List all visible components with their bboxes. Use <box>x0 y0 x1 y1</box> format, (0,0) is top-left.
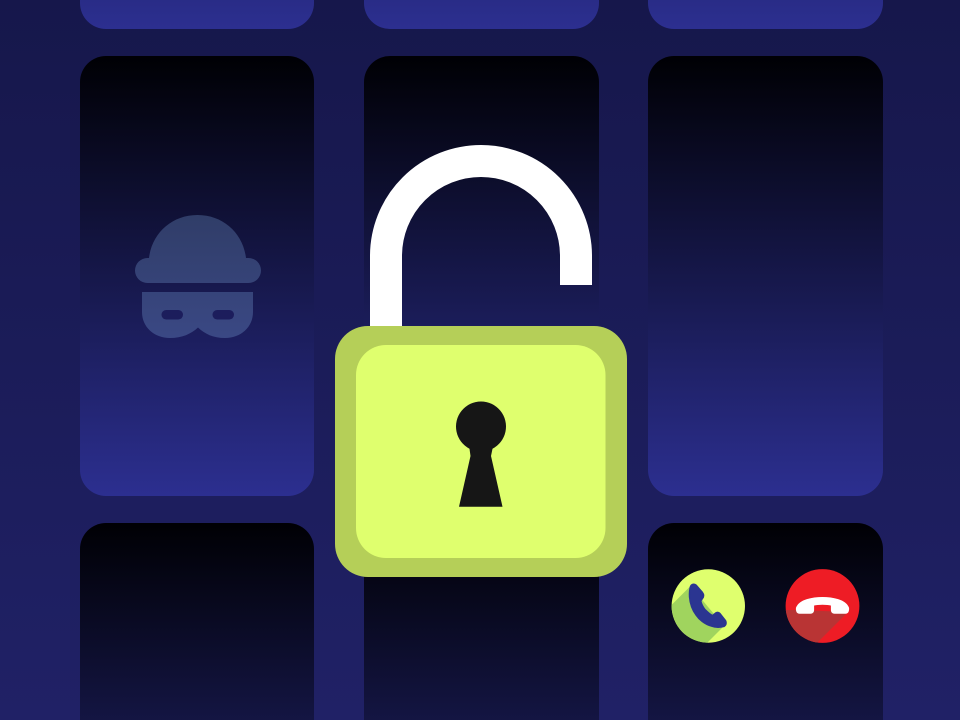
middle row screen left <box>80 56 314 496</box>
middle row screen centre <box>364 56 599 496</box>
top row screen centre <box>364 0 599 29</box>
green long shadow <box>672 586 722 643</box>
handset <box>796 597 849 613</box>
thief mask <box>142 292 253 338</box>
green circle <box>672 569 745 643</box>
red long shadow <box>786 610 846 642</box>
icon: accept call button <box>672 569 745 643</box>
red circle <box>786 569 859 643</box>
bottom row screen centre <box>364 523 599 720</box>
icon: decline call button <box>786 569 860 643</box>
icon: open padlock <box>335 161 627 577</box>
bottom row screen right <box>648 523 883 720</box>
thief hat <box>135 215 261 283</box>
padlock body <box>335 326 627 577</box>
handset <box>689 584 726 627</box>
keyhole <box>456 402 506 507</box>
bottom row screen left <box>80 523 314 720</box>
middle row screen right <box>648 56 883 496</box>
padlock face <box>356 345 606 558</box>
top row screen right <box>648 0 883 29</box>
icon: masked thief <box>135 215 261 338</box>
mask eye left <box>162 310 183 320</box>
top row screen left <box>80 0 314 29</box>
padlock shackle <box>386 161 576 328</box>
mask eye right <box>212 310 234 320</box>
